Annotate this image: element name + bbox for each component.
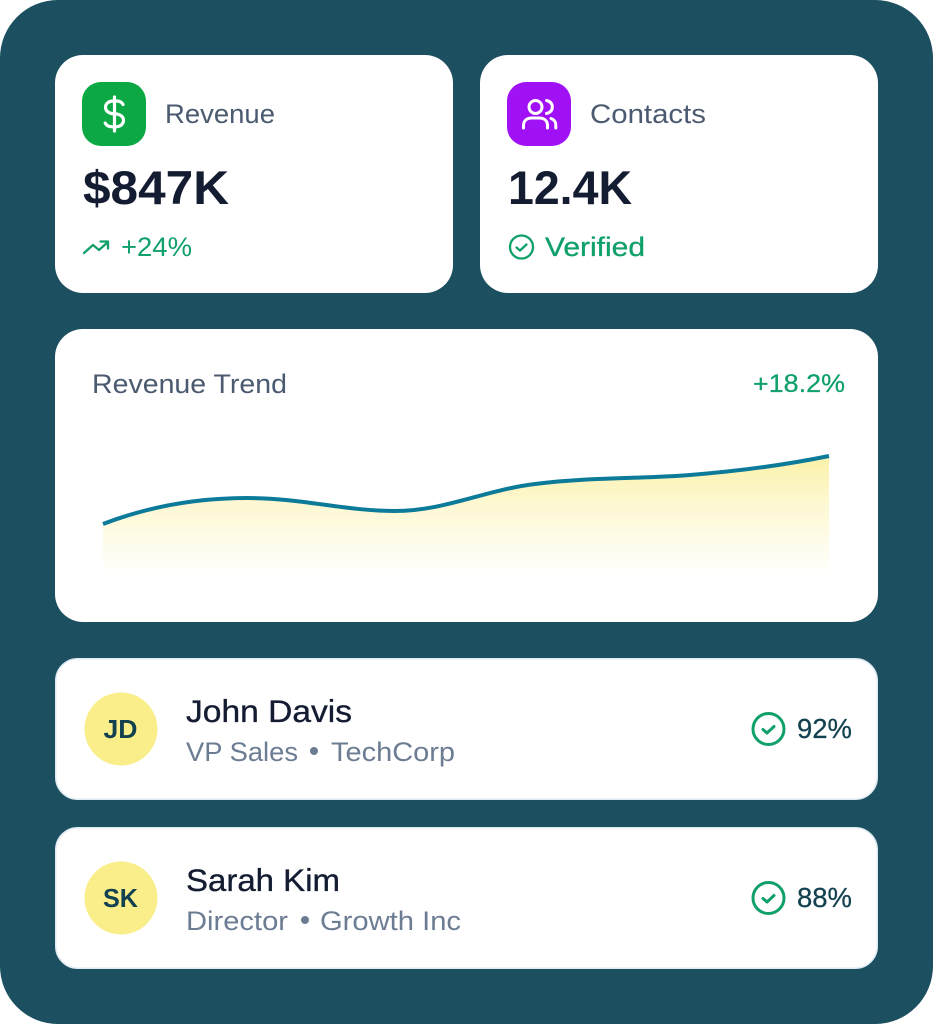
panel: contacts card	[480, 55, 878, 293]
role: VP Sales, TechCorp: TechCorp	[331, 737, 455, 767]
panel: revenue card	[55, 55, 453, 293]
avatar: JD	[84, 692, 158, 766]
change: +24%: +24%	[121, 232, 192, 262]
area chart fill	[103, 456, 829, 578]
label: Revenue: Revenue	[165, 99, 275, 129]
icon: verified check	[510, 236, 533, 258]
status: Verified: Verified	[545, 232, 645, 262]
name: Sarah Kim: Sarah Kim	[186, 862, 340, 898]
avatar: SK	[84, 862, 158, 934]
role: VP Sales, TechCorp	[186, 737, 455, 767]
role: Director, Growth Inc: Director	[186, 906, 288, 936]
role: Director, Growth Inc: Growth Inc	[320, 906, 461, 936]
chart title: Revenue Trend	[92, 369, 287, 399]
value: 12.4K: 12.4K	[508, 161, 632, 214]
name: John Davis: John Davis	[186, 693, 352, 729]
icon: check circle	[753, 882, 784, 914]
panel: revenue trend chart	[55, 329, 878, 622]
label: Contacts: Contacts	[590, 99, 706, 129]
avatar: SK: SK	[103, 885, 139, 913]
panel: John Davis row	[56, 659, 877, 799]
chart change: +18.2%: +18.2%	[753, 370, 845, 398]
score: 88%: 88%	[797, 882, 852, 913]
role: Director, Growth Inc	[186, 906, 461, 936]
icon: dollar	[82, 82, 146, 146]
icon: users	[507, 82, 571, 146]
line chart	[103, 456, 829, 524]
panel: Sarah Kim row	[56, 828, 877, 968]
role: VP Sales, TechCorp: VP Sales	[186, 737, 298, 767]
icon: trending up arrow	[84, 242, 108, 253]
avatar: JD: JD	[104, 716, 138, 744]
value: $847K: $847K	[83, 161, 229, 214]
score: 92%: 92%	[797, 713, 852, 744]
icon: check circle	[753, 714, 784, 744]
